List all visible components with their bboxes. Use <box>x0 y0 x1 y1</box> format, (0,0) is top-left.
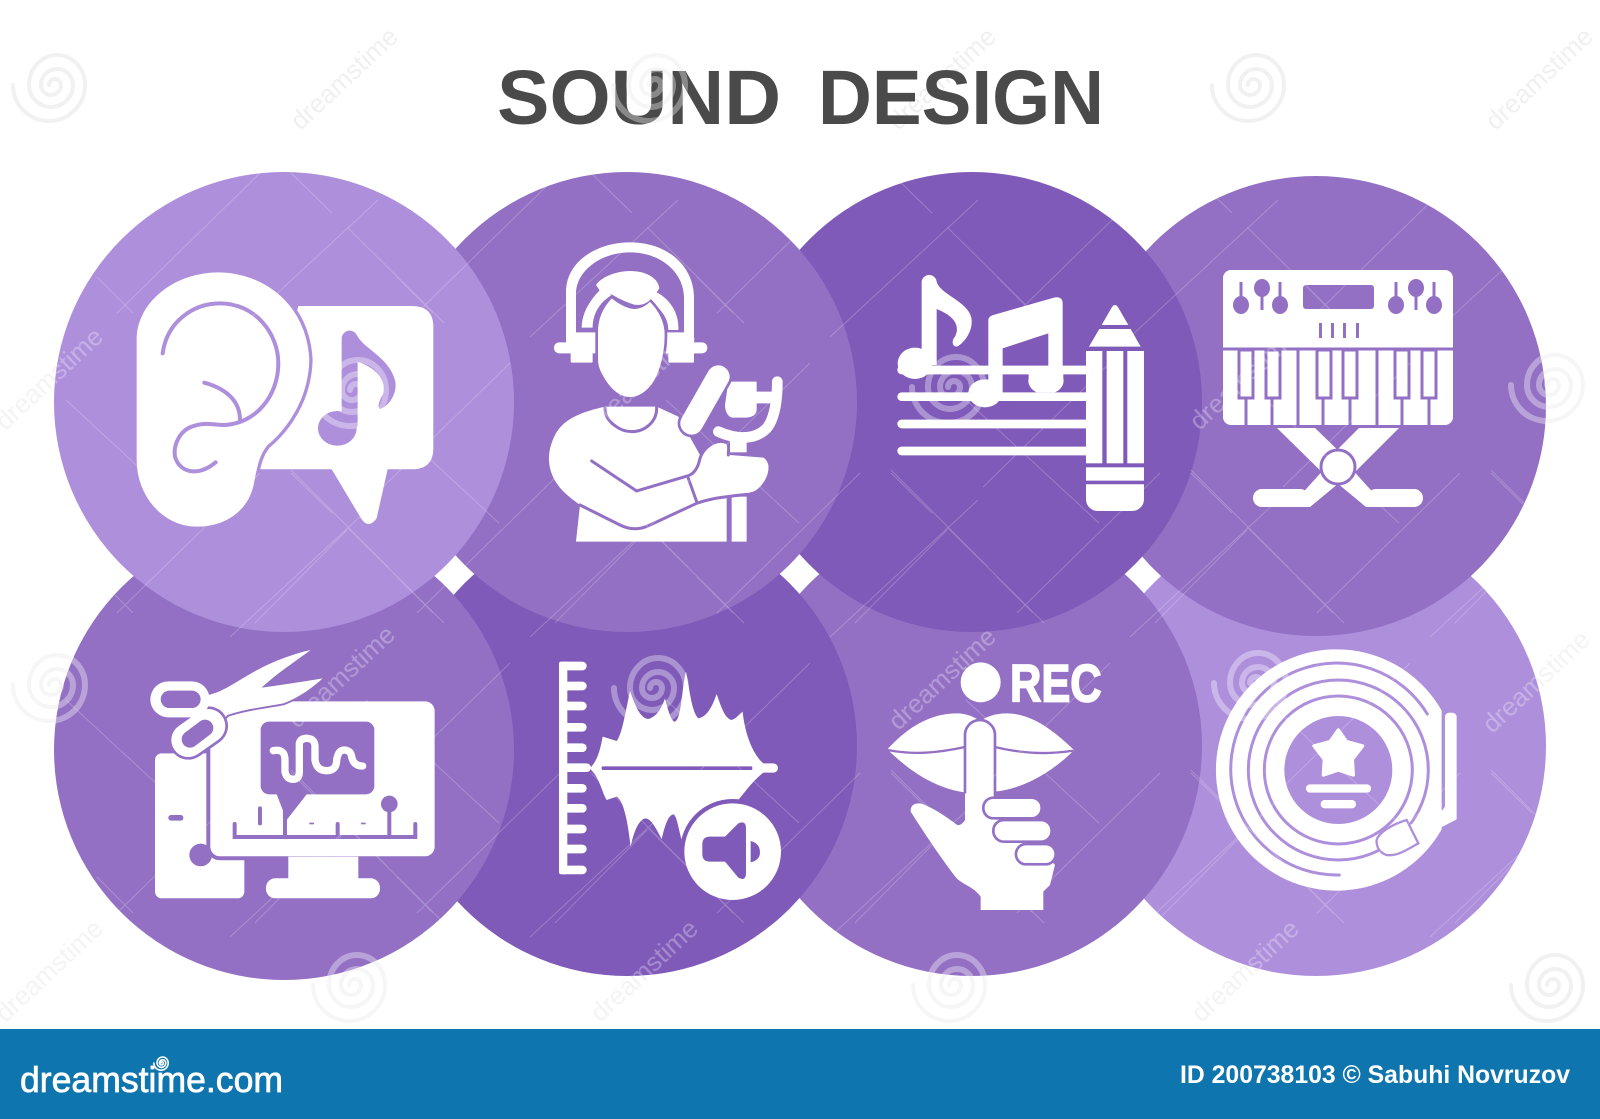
watermark layer on white background: dreamstime <box>284 21 404 136</box>
icon: man with headphones and microphone <box>549 242 777 542</box>
panel: audio editing <box>54 520 514 980</box>
watermark overlay on panels: dreamstime <box>281 619 401 734</box>
panel: vinyl record <box>1086 516 1546 976</box>
panel: recording silence <box>742 516 1202 976</box>
watermark overlay on panels: dreamstime <box>584 913 704 1028</box>
watermark layer on white background: dreamstime <box>1185 913 1305 1028</box>
watermark layer on white background: dreamstime <box>1479 21 1599 136</box>
icon: ear with music note bubble <box>135 271 433 528</box>
icon: hush finger and REC: REC <box>1010 655 1102 714</box>
watermark layer on white background: dreamstime <box>584 913 704 1028</box>
icon: hush finger and REC <box>887 655 1102 910</box>
title: DESIGN <box>818 55 1104 141</box>
title: SOUND <box>497 55 781 141</box>
watermark overlay on panels: dreamstime <box>582 321 702 436</box>
panel: ear and music <box>54 172 514 632</box>
icon: waveform with ruler and speaker <box>559 662 785 904</box>
panel: music notation <box>742 172 1202 632</box>
watermark layer on white background: dreamstime <box>1476 624 1596 739</box>
icon: keyboard on stand <box>1223 270 1453 507</box>
footer credit: ID 200738103 © Sabuhi Novruzov <box>1180 1061 1570 1089</box>
watermark overlay on panels: dreamstime <box>1183 321 1303 436</box>
icon: notes on staff with pencil <box>898 275 1144 511</box>
footer bar <box>0 1029 1600 1119</box>
watermark overlay on panels: dreamstime <box>1185 913 1305 1028</box>
panel: sound waveform <box>397 516 857 976</box>
icon: vinyl record <box>1216 649 1457 891</box>
icon: computer with scissors <box>155 650 437 898</box>
title <box>497 55 1104 141</box>
watermark overlay on panels: dreamstime <box>882 621 1002 736</box>
panel: synthesizer keyboard <box>1086 176 1546 636</box>
panel: sound engineer <box>397 172 857 632</box>
footer logo: dreamstime.com <box>20 1059 283 1100</box>
watermark layer on white background: dreamstime <box>882 21 1002 136</box>
watermark overlay on panels: dreamstime <box>1476 624 1596 739</box>
